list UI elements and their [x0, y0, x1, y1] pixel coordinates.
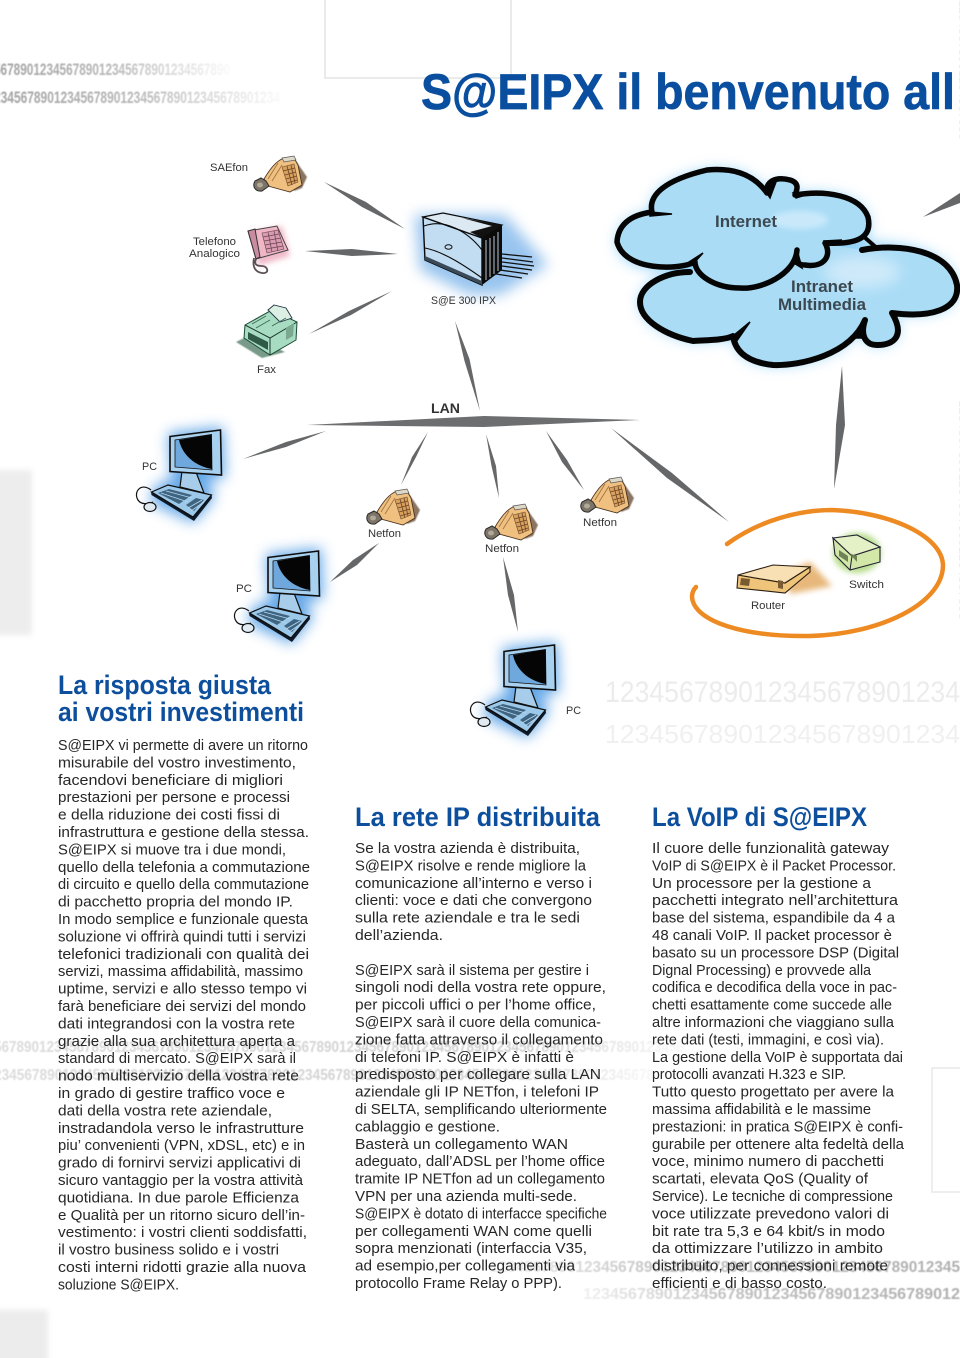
- text block: right column: basato su un processore DSP (Digital: [652, 945, 899, 961]
- text block: left column: piu’ convenienti (VPN, xDSL, etc) e in: [58, 1138, 305, 1154]
- text block: left column: dati della vostra rete aziendale,: [58, 1103, 272, 1119]
- heading: La VoIP di S@EIPX: La VoIP di S@EIPX: [652, 802, 867, 832]
- icon: Netfon phone 1: [367, 489, 420, 525]
- text block: left column: quello della telefonia a commutazione: [58, 860, 310, 876]
- icon: switch: [833, 533, 881, 573]
- text block: middle column: tramite IP NETfon ad un collegamento: [355, 1172, 605, 1188]
- background: number rows and pale shapes: 56789012345678901234567890123456789012345678901234567890123456789012345678901234567890123456: [0, 1039, 684, 1056]
- icon: clouds: [617, 170, 957, 365]
- text block: left column: uptime, servizi e allo stesso tempo vi: [58, 982, 307, 998]
- text block: right column: chetti esattamente come succede alle: [652, 998, 892, 1014]
- icon: fax: [236, 305, 297, 358]
- text block: middle column: singoli nodi della vostra rete oppure,: [355, 980, 606, 996]
- text block: left column: soluzione vi offrirà quindi tutti i servizi: [58, 929, 306, 945]
- text block: left column: farà beneficiare dei servizi del mondo: [58, 999, 306, 1015]
- icon: SAEfon phone: [254, 156, 307, 192]
- text block: right column: protocolli avanzati H.323 e SIP.: [652, 1067, 846, 1083]
- cloud label: Intranet Multimedia: Multimedia: [778, 296, 867, 314]
- text block: right column: da ottimizzare l’utilizzo in ambito: [652, 1241, 883, 1257]
- text block: right column: Un processore per la gestione a: [652, 876, 872, 892]
- text block: left column: di pacchetto propria del mondo IP.: [58, 895, 293, 911]
- text block: middle column: zione fatta attraverso il collegamento: [355, 1032, 603, 1048]
- text block: right column: 48 canali VoIP. Il packet processor è: [652, 928, 892, 944]
- text block: right column: VoIP di S@EIPX è il Packet Processor.: [652, 858, 896, 874]
- icon: router: [737, 562, 832, 594]
- text block: middle column: [355, 841, 607, 1292]
- label: Telefono Analogico: [189, 236, 240, 260]
- text block: left column: instradandola verso le infrastrutture: [58, 1121, 304, 1137]
- text block: middle column: S@EIPX sarà il cuore della comunica-: [355, 1015, 601, 1031]
- text block: middle column: aziendale gli IP NETfon, i telefoni IP: [355, 1085, 599, 1101]
- label: PC lower: PC: [566, 705, 581, 717]
- text block: left column: nodo multiservizio della vostra rete: [58, 1069, 299, 1085]
- background: number rows and pale shapes: 567890123456789012345678901234567890: [0, 60, 230, 79]
- text block: middle column: protocollo Frame Relay o PPP).: [355, 1276, 562, 1292]
- icon: PC middle: [234, 548, 323, 644]
- label: Switch: Switch: [849, 579, 884, 591]
- icon: S@E 300 IPX server: [415, 213, 548, 295]
- connector spikes: [243, 182, 960, 632]
- text block: middle column: S@EIPX è dotato di interfacce specifiche: [355, 1206, 607, 1222]
- text block: left column: standard di mercato. S@EIPX sarà il: [58, 1051, 296, 1067]
- text block: middle column: S@EIPX sarà il sistema per gestire i: [355, 963, 589, 979]
- text block: middle column: Basterà un collegamento WAN: [355, 1137, 568, 1153]
- background: number rows and pale shapes: 234567890123456789012345678901234567890123456789012345678901234567890123456789012345678: [0, 1067, 654, 1084]
- cloud label: Intranet Multimedia: [778, 278, 867, 314]
- orange ring: [692, 510, 943, 636]
- text block: middle column: per collegamenti WAN come quelli: [355, 1224, 592, 1240]
- text block: right column: voce utilizzate prevedono valori di: [652, 1206, 889, 1222]
- text block: middle column: sopra menzionati (interfaccia V35,: [355, 1241, 587, 1257]
- text block: left column: e della riduzione dei costi fissi di: [58, 808, 280, 824]
- label: S@E 300 IPX: S@E 300 IPX: [431, 295, 497, 307]
- label: Telefono Analogico: Analogico: [189, 248, 240, 260]
- text block: middle column: comunicazione all’interno e verso i: [355, 876, 592, 892]
- text block: left column: S@EIPX si muove tra i due mondi,: [58, 842, 286, 858]
- LAN label: LAN: [431, 401, 460, 416]
- text block: middle column: VPN per una azienda multi-sede.: [355, 1189, 577, 1205]
- text block: right column: prestazioni: in pratica S@EIPX è confi-: [652, 1119, 903, 1135]
- text block: middle column: per piccoli uffici o per l’home office,: [355, 998, 596, 1014]
- icon: analog phone: [248, 226, 290, 273]
- text block: left column: in grado di gestire traffico voce e: [58, 1086, 285, 1102]
- label: Netfon 1: Netfon: [368, 528, 401, 540]
- background: number rows and pale shapes: 2345678901234567890123456789012345678901234: [0, 88, 280, 107]
- icon: Netfon phone 2: [485, 504, 538, 540]
- text block: middle column: clienti: voce e dati che convergono: [355, 893, 592, 909]
- text block: left column: grado di fornirvi servizi applicativi di: [58, 1156, 301, 1172]
- text block: left column: e Qualità per un ritorno sicuro dell’in-: [58, 1208, 305, 1224]
- text block: left column: S@EIPX vi permette di avere un ritorno: [58, 738, 308, 754]
- cloud label: Internet: Internet: [715, 213, 778, 231]
- text block: right column: scartati, elevata QoS (Quality of: [652, 1172, 869, 1188]
- heading: La risposta giusta: La risposta giusta: [58, 670, 272, 700]
- text block: left column: prestazioni per persone e processi: [58, 790, 290, 806]
- text block: middle column: di SELTA, semplificando ulteriormente: [355, 1102, 607, 1118]
- text block: right column: voce, minimo numero di pacchetti: [652, 1154, 884, 1170]
- text block: right column: pacchetti integrato nell’architettura: [652, 893, 899, 909]
- text block: right column: base del sistema, espandibile da 4 a: [652, 911, 896, 927]
- text block: left column: vestimento: i vostri clienti soddisfatti,: [58, 1225, 307, 1241]
- text block: middle column: di telefoni IP. S@EIPX è infatti è: [355, 1050, 574, 1066]
- text block: right column: La gestione della VoIP è supportata dai: [652, 1050, 903, 1066]
- text block: left column: grazie alla sua architettura aperta a: [58, 1034, 296, 1050]
- text block: left column: [58, 738, 310, 1293]
- text block: right column: [652, 841, 905, 1292]
- label: Router: Router: [751, 600, 785, 612]
- label: PC left: PC: [142, 461, 157, 473]
- text block: right column: altre informazioni che viaggiano sulla: [652, 1015, 895, 1031]
- label: Netfon 2: Netfon: [485, 543, 519, 555]
- text block: left column: quotidiana. In due parole Efficienza: [58, 1190, 300, 1206]
- text block: middle column: ad esempio,per collegamenti via: [355, 1259, 576, 1275]
- text block: left column: In modo semplice e funzionale questa: [58, 912, 309, 928]
- background: number rows and pale shapes: 123456789012345678901234: [605, 719, 960, 749]
- label: Fax: Fax: [257, 364, 277, 376]
- text block: left column: servizi, massima affidabilità, massimo: [58, 964, 303, 980]
- text block: right column: bit rate tra 5,3 e 64 kbit/s in modo: [652, 1224, 885, 1240]
- network diagram: [136, 156, 960, 738]
- text block: middle column: cablaggio e gestione.: [355, 1119, 500, 1135]
- text block: right column: Service). Le tecniche di compressione: [652, 1189, 893, 1205]
- text block: right column: gurabile per ottenere alta fedeltà della: [652, 1137, 905, 1153]
- icon: PC left: [136, 427, 225, 523]
- text block: middle column: Se la vostra azienda è distribuita,: [355, 841, 580, 857]
- icon: Netfon phone 3: [581, 477, 634, 513]
- background: number rows and pale shapes: 123456789012345678901234567890123456789012: [583, 1286, 960, 1303]
- text block: left column: telefonici tradizionali con qualità dei: [58, 947, 309, 963]
- heading: La rete IP distribuita: La rete IP distribuita: [355, 802, 601, 832]
- text block: left column: facendovi beneficiare di migliori: [58, 773, 283, 789]
- LAN bar: [307, 416, 640, 427]
- label: SAEfon: SAEfon: [210, 162, 248, 174]
- text block: right column: massima affidabilità e le massime: [652, 1102, 871, 1118]
- cloud label: Intranet Multimedia: Intranet: [791, 278, 854, 296]
- heading: La risposta giusta: [58, 670, 304, 727]
- text block: right column: Dignal Processing) e provvede alla: [652, 963, 872, 979]
- text block: right column: Tutto questo progettato per avere la: [652, 1085, 895, 1101]
- text block: left column: infrastruttura e gestione della stessa.: [58, 825, 309, 841]
- text block: left column: il vostro business solido e i vostri: [58, 1243, 279, 1259]
- text block: left column: sicuro vantaggio per la vostra attività: [58, 1173, 304, 1189]
- label: Netfon 3: Netfon: [583, 517, 617, 529]
- text block: left column: misurabile del vostro investimento,: [58, 755, 296, 771]
- text block: right column: codifica e decodifica della voce in pac-: [652, 980, 897, 996]
- text block: middle column: predisposto per collegare sulla LAN: [355, 1067, 601, 1083]
- text block: left column: soluzione S@EIPX.: [58, 1277, 179, 1293]
- text block: left column: di circuito e quello della commutazione: [58, 877, 309, 893]
- text block: left column: costi interni ridotti grazie alla nuova: [58, 1260, 307, 1276]
- icon: PC lower: [470, 642, 559, 738]
- text block: right column: Il cuore delle funzionalità gateway: [652, 841, 890, 857]
- text block: right column: efficienti e di basso costo.: [652, 1276, 827, 1292]
- text block: middle column: sulla rete aziendale e tra le sedi: [355, 911, 580, 927]
- text block: middle column: S@EIPX risolve e rende migliore la: [355, 858, 587, 874]
- text block: left column: dati integrandosi con la vostra rete: [58, 1016, 295, 1032]
- heading: La risposta giusta: ai vostri investimenti: [58, 697, 304, 727]
- text block: right column: distribuito, per connessioni remote: [652, 1259, 888, 1275]
- text block: middle column: dell’azienda.: [355, 928, 443, 944]
- label: PC middle: PC: [236, 583, 252, 595]
- text block: right column: rete dati (testi, immagini, e così via).: [652, 1032, 884, 1048]
- text block: middle column: adeguato, dall’ADSL per l’home office: [355, 1154, 605, 1170]
- label: Telefono Analogico: Telefono: [193, 236, 236, 248]
